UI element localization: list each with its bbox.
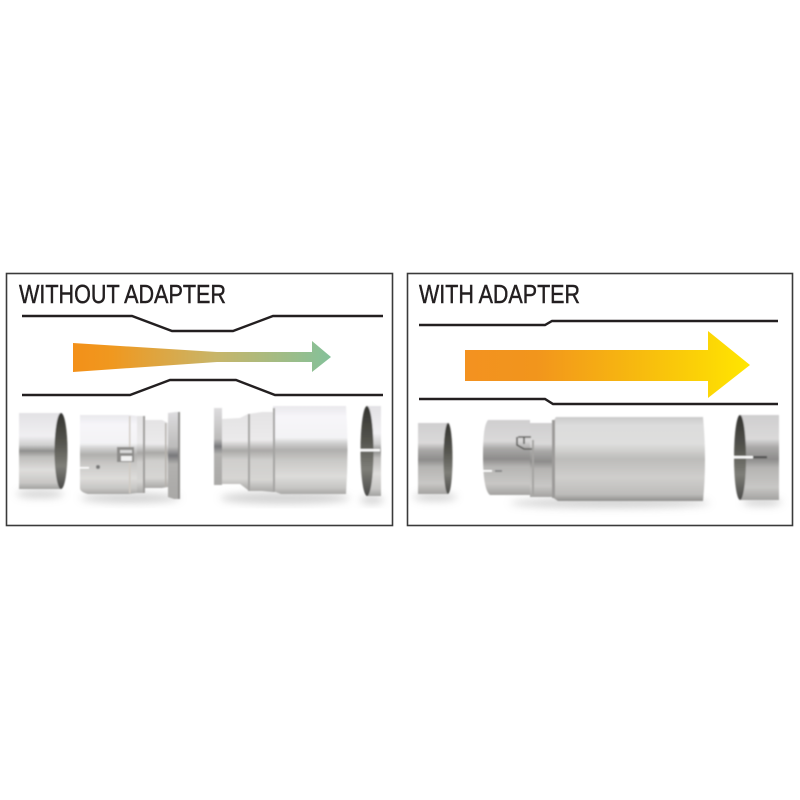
photo: one-piece adapter [413,415,782,508]
clamp slot [117,447,134,462]
clamp slot [517,437,532,449]
floor shadows [413,493,782,508]
panel: with adapter [408,274,792,526]
one-piece adapter [483,417,705,501]
reducer section [214,406,348,494]
heading: with adapter: WITH ADAPTER [419,279,580,309]
restricted pipe outline [22,316,383,395]
right pipe stub [360,406,381,496]
smooth pipe outline [419,321,778,404]
heading: without adapter: WITHOUT ADAPTER [19,279,226,309]
left pipe stub [19,413,68,489]
floor shadows [16,490,384,504]
left pipe stub [418,423,452,494]
arrow: narrowing flow [73,341,331,372]
photo: separate pipe parts [16,406,384,504]
panel: without adapter [6,274,392,526]
expander section [80,412,180,499]
right pipe stub [733,415,779,500]
arrow: full flow [465,331,750,398]
